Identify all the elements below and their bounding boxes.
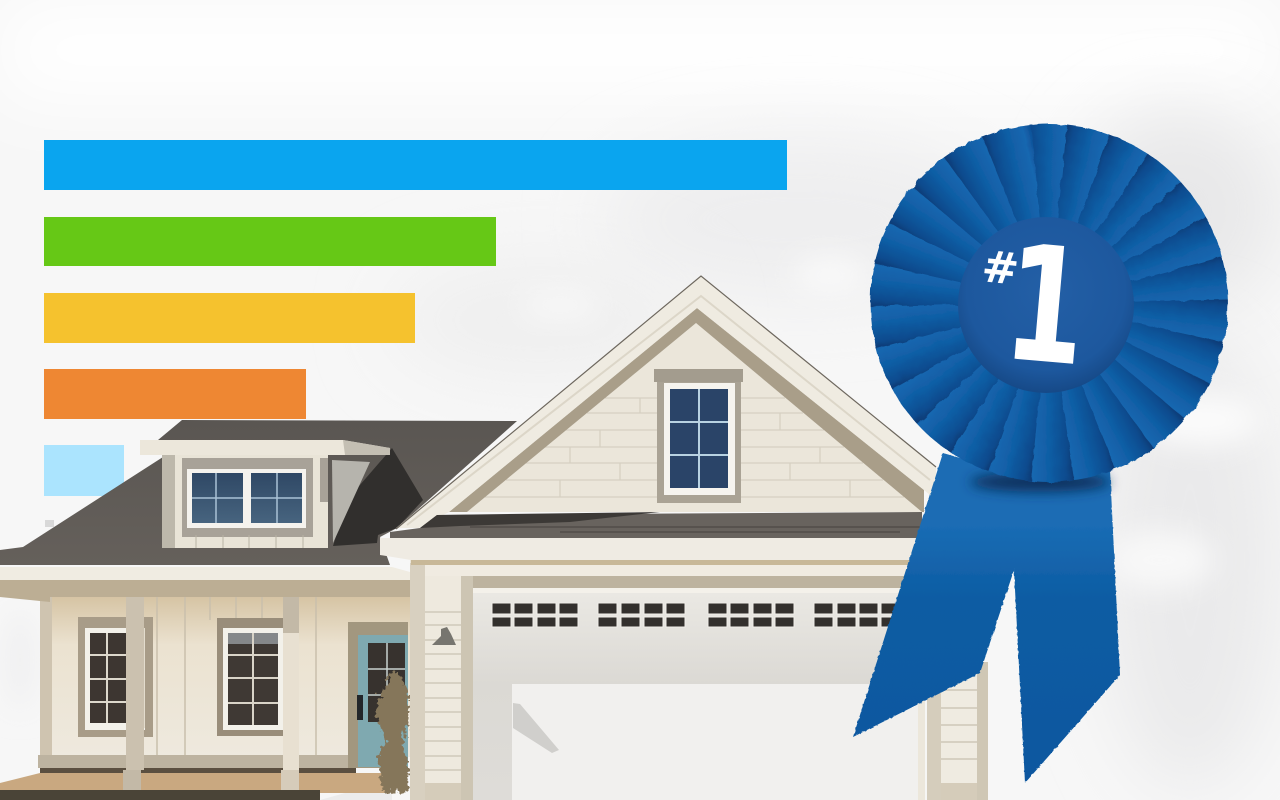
hash sign: # (979, 241, 1021, 296)
dormer shadow (333, 448, 423, 546)
garage cornice (380, 538, 918, 576)
bar 1: blue (44, 140, 787, 190)
gable fascia (396, 276, 936, 528)
dormer (140, 440, 390, 548)
gable shingle lines (485, 398, 904, 497)
garage door window groups (492, 603, 900, 627)
shrub (375, 672, 408, 792)
left tail (853, 453, 1035, 737)
bar chart (44, 140, 787, 527)
porch soffit (0, 580, 410, 602)
porch base band (38, 755, 356, 768)
porch window left (78, 617, 153, 737)
porch wall (40, 597, 412, 757)
rosette petals (868, 123, 1230, 483)
bar 6: faint grey stub (45, 520, 54, 527)
digit one: 1 (998, 210, 1094, 402)
wall lamp (432, 627, 456, 645)
garage door (473, 588, 918, 800)
rosette shadow on ribbon (970, 472, 1110, 492)
ribbon tails (853, 453, 1120, 783)
bar 4: orange (44, 369, 306, 419)
porch ground (0, 768, 392, 800)
garage wall (410, 560, 925, 800)
porch columns (123, 597, 299, 790)
bar 2: green (44, 217, 496, 266)
garage side wall behind ribbon (918, 662, 988, 800)
gable fascia fold (407, 296, 930, 525)
house (0, 276, 988, 800)
gable wall (467, 323, 922, 512)
gable trim (449, 308, 924, 512)
award ribbon (853, 123, 1230, 783)
lower garage roof (390, 512, 922, 538)
gable window (654, 369, 743, 503)
rosette centre button (958, 217, 1134, 393)
left hip roof (0, 420, 517, 565)
bar 5: light blue (44, 445, 124, 496)
porch window right (217, 618, 285, 736)
porch fascia (0, 567, 410, 580)
right tail (1014, 470, 1120, 783)
gable outline (396, 276, 936, 529)
bar 3: yellow (44, 293, 415, 343)
front door (348, 622, 408, 768)
number one label (979, 210, 1094, 402)
